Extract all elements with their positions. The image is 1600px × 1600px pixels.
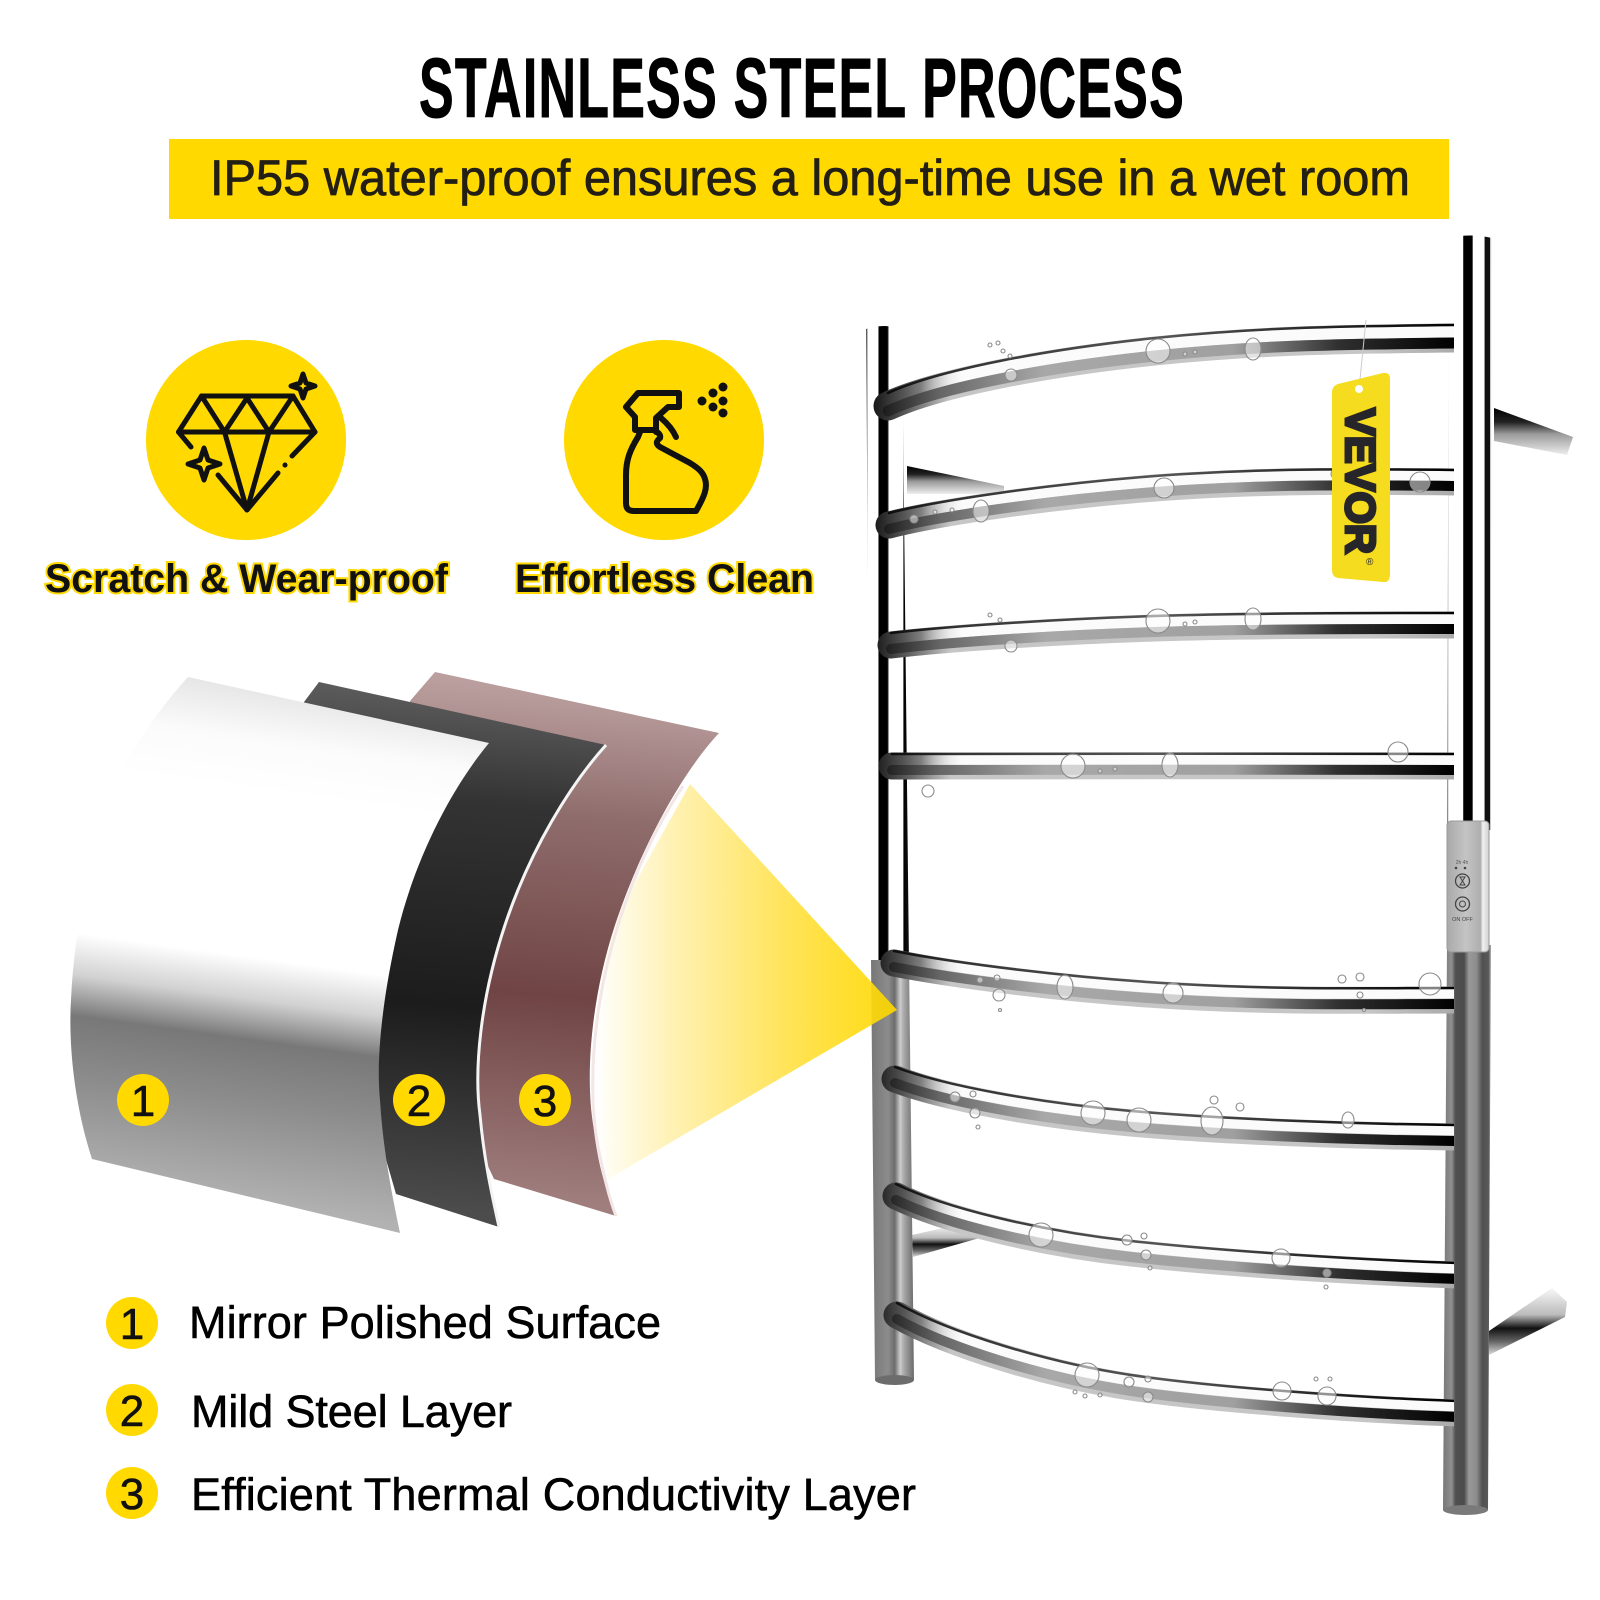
bar 6 (895, 1067, 1460, 1141)
label: scratch and wear-proof: Scratch & Wear-proof (45, 557, 449, 601)
hang tag (1332, 320, 1390, 582)
subtitle banner (169, 139, 1449, 219)
legend (106, 1297, 916, 1520)
icon: spray bottle (564, 340, 764, 540)
control panel: ON OFF (1452, 917, 1474, 923)
bar 1 (888, 325, 1460, 411)
feature: effortless clean (515, 340, 814, 601)
hang tag: VEVOR (1337, 408, 1384, 554)
feature: scratch and wear-proof (45, 340, 449, 601)
bar 7 (896, 1184, 1460, 1279)
badge 2: 2 (407, 1077, 431, 1126)
icon: diamond (146, 340, 346, 540)
legend item 3: 3 (120, 1470, 144, 1519)
bar 5 (894, 951, 1460, 1004)
layered steel cross-section (70, 672, 897, 1233)
bar 3 (891, 613, 1460, 649)
badge 3: 3 (533, 1077, 557, 1126)
legend item 3: Efficient Thermal Conductivity Layer (191, 1469, 916, 1520)
light beam pointer (570, 784, 897, 1179)
badge 2 (393, 1074, 445, 1126)
subtitle banner: IP55 water-proof ensures a long-time use in a wet room (210, 150, 1410, 206)
hang tag: ® (1366, 557, 1374, 568)
label: effortless clean: Effortless Clean (515, 557, 814, 601)
legend item 1: 1 (120, 1300, 144, 1349)
control panel: 2h 4h (1456, 860, 1468, 866)
product: heated towel rack (866, 236, 1573, 1515)
badge 3 (519, 1074, 571, 1126)
left post (866, 326, 914, 1385)
wall brackets (907, 408, 1573, 1355)
badge 1 (117, 1074, 169, 1126)
badge 1: 1 (131, 1077, 155, 1126)
layer 2: mild steel layer (304, 682, 606, 1227)
layer 1: mirror polished surface (70, 677, 489, 1233)
legend item 1: Mirror Polished Surface (189, 1297, 661, 1348)
bar 4 (892, 754, 1460, 770)
legend item 2: Mild Steel Layer (191, 1386, 512, 1437)
legend item 2: 2 (120, 1387, 144, 1436)
water droplets (910, 338, 1441, 1405)
right post (1443, 236, 1492, 1515)
layer 3: thermal conductivity layer (410, 672, 719, 1216)
bar 2 (889, 469, 1460, 529)
bar 8 (897, 1303, 1460, 1417)
control panel (1447, 821, 1489, 952)
towel bars (888, 325, 1460, 1417)
